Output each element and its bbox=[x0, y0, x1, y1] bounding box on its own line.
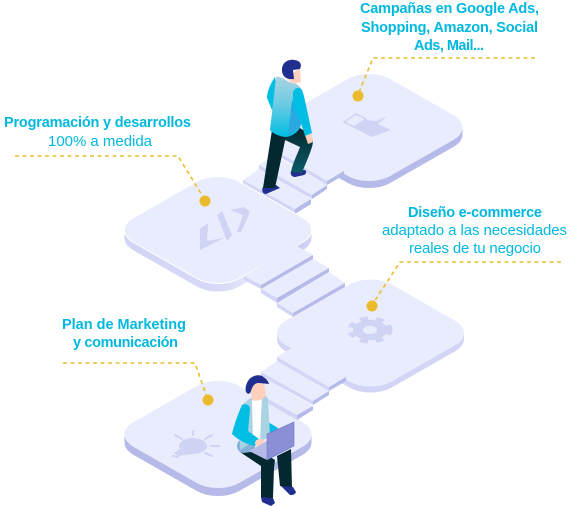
text: e-commerce: adaptado a las necesidades bbox=[382, 222, 567, 239]
callout leader: marketing bbox=[63, 363, 214, 406]
text: e-commerce: Diseño e-commerce bbox=[408, 205, 542, 221]
text: marketing: y comunicación bbox=[73, 335, 178, 351]
text: e-commerce: reales de tu negocio bbox=[409, 240, 541, 257]
text: campaigns: Shopping, Amazon, Social bbox=[361, 20, 538, 36]
stairs: upper flight bbox=[243, 137, 344, 214]
text: programming: 100% a medida bbox=[48, 133, 153, 150]
platform: advertising campaigns bbox=[275, 74, 463, 188]
text: campaigns bbox=[360, 1, 539, 54]
figure: man climbing stairs bbox=[262, 60, 313, 194]
text: campaigns: Campañas en Google Ads, bbox=[360, 1, 539, 17]
stairs: middle flight bbox=[244, 245, 345, 317]
callout leader: campaigns bbox=[352, 58, 535, 102]
text: marketing: Plan de Marketing bbox=[62, 317, 186, 333]
icon: code brackets bbox=[200, 207, 250, 250]
text: e-commerce bbox=[382, 205, 567, 257]
text: programming: Programación y desarrollos bbox=[4, 115, 191, 131]
callout leader: programming bbox=[15, 156, 210, 206]
callout leader: e-commerce bbox=[366, 262, 561, 312]
text: campaigns: Ads, Mail... bbox=[414, 38, 484, 54]
icon: gear bbox=[351, 319, 389, 341]
icon: light bulb bbox=[173, 431, 219, 457]
platform: marketing plan bbox=[124, 381, 312, 496]
icon: thumbs up bbox=[344, 114, 391, 137]
stairs: lower flight bbox=[245, 347, 346, 420]
platform: e-commerce design bbox=[277, 279, 464, 393]
text: marketing bbox=[62, 317, 186, 351]
text: programming bbox=[4, 115, 191, 150]
platform: programming bbox=[124, 176, 312, 292]
figure: man with laptop bbox=[232, 375, 296, 506]
